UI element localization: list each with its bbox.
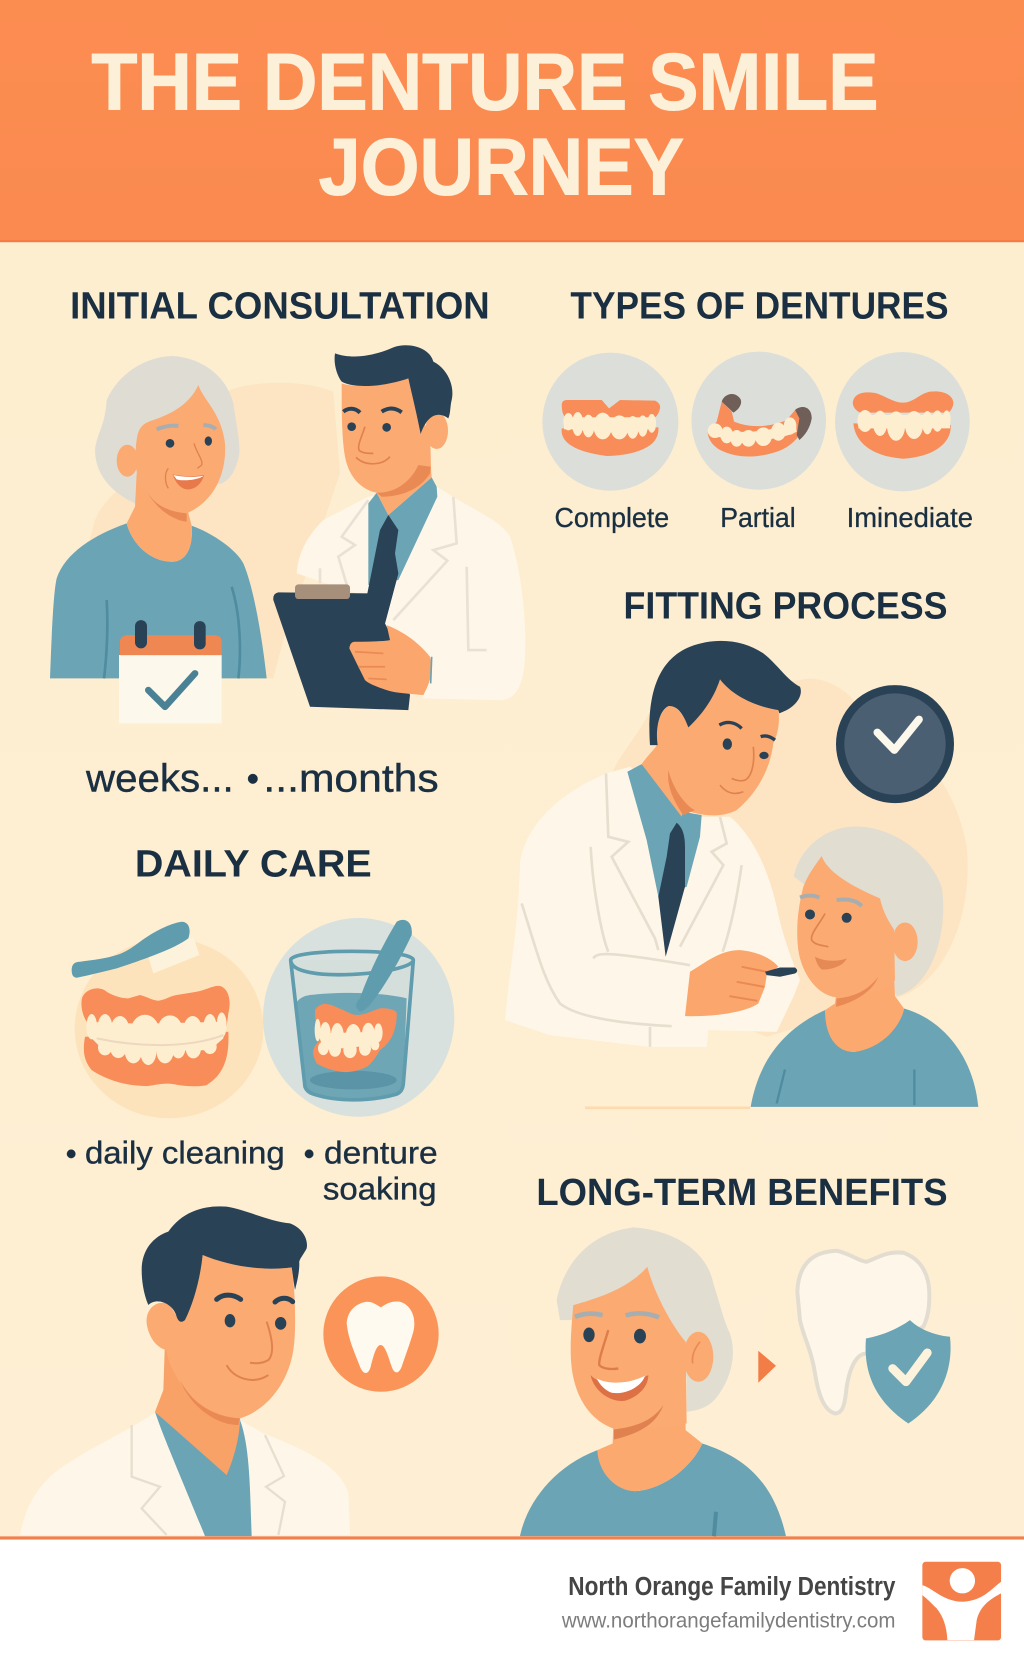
illustration: smiling dentist (20, 1206, 350, 1536)
panel: initial consultation (50, 285, 525, 801)
care list: denture (324, 1134, 438, 1170)
header banner (0, 0, 1024, 242)
footer: website: www.northorangefamilydentistry.com (561, 1609, 895, 1633)
care list (67, 1134, 438, 1207)
peach backdrop (50, 383, 340, 678)
icon: shield with check (866, 1320, 951, 1423)
denture soaking in glass (263, 918, 454, 1117)
footer (0, 1536, 1024, 1666)
happy patient (520, 1227, 786, 1536)
illustrations: happy patient and tooth (520, 1227, 951, 1536)
icon: tooth (797, 1251, 929, 1413)
timeline text (85, 757, 439, 801)
panel: daily care (67, 843, 454, 1207)
labels: denture types: Iminediate (847, 502, 973, 533)
timeline text: ...months (263, 757, 439, 801)
icon: clock check badge (836, 685, 954, 803)
arrow (758, 1351, 776, 1383)
denture: complete (542, 353, 678, 491)
icon: calendar with check (119, 620, 222, 723)
heading: long-term benefits: LONG-TERM BENEFITS (536, 1171, 948, 1214)
heading: fitting process: FITTING PROCESS (624, 584, 948, 627)
footer: practice name: North Orange Family Dentistry (568, 1573, 896, 1601)
heading: daily care: DAILY CARE (135, 843, 372, 886)
logo (922, 1562, 1001, 1640)
labels: denture types: Complete (554, 502, 669, 533)
denture: immediate (835, 352, 970, 491)
panel: dentist portrait (20, 1206, 439, 1536)
labels: denture types: Partial (720, 502, 796, 533)
illustration: fitting scene (505, 641, 978, 1108)
title: JOURNEY (319, 122, 684, 212)
icon: tooth badge (323, 1276, 439, 1392)
denture icons (542, 352, 970, 491)
denture: partial (691, 352, 826, 490)
panel: types of dentures (542, 285, 973, 533)
patient being fitted (585, 826, 978, 1108)
heading: initial consultation: INITIAL CONSULTATION (70, 285, 490, 328)
older woman patient (50, 356, 267, 678)
denture being brushed (72, 922, 230, 1086)
title (91, 37, 878, 212)
timeline text: weeks... (85, 757, 234, 801)
care list: soaking (323, 1171, 437, 1207)
page background (0, 242, 1024, 1538)
dentist fitting denture (505, 641, 801, 1047)
panel: long-term benefits (520, 1171, 951, 1536)
care list: daily cleaning (85, 1134, 285, 1170)
illustration: consultation scene (50, 345, 525, 723)
heading: types of dentures: TYPES OF DENTURES (570, 285, 949, 328)
panel: fitting process (505, 584, 978, 1108)
dentist with clipboard (273, 345, 525, 710)
illustrations: denture cleaning (72, 918, 454, 1118)
labels: denture types (554, 502, 973, 533)
title: THE DENTURE SMILE (91, 37, 878, 127)
